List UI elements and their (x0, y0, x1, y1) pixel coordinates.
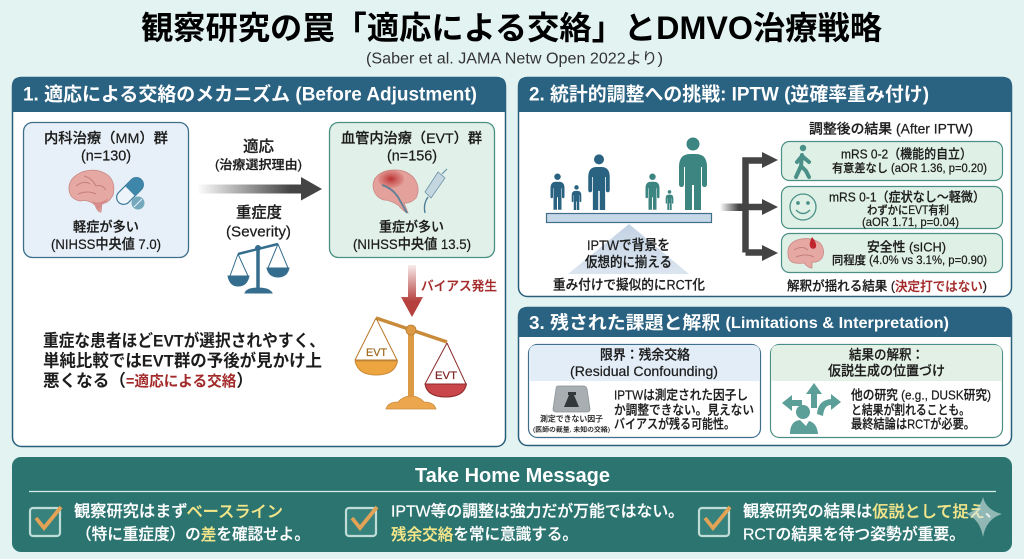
result: safety: 安全性 (sICH) (867, 240, 946, 254)
title: 観察研究の罠「適応による交絡」とDMVO治療戦略 (141, 10, 882, 46)
card: residual confounding: IPTWは測定された因子し (614, 388, 748, 402)
MM group box: 内科治療（MM）群 (44, 130, 168, 146)
panel 3 heading: 3. 残された課題と解釈 (Limitations & Interpretation) (529, 312, 949, 333)
balance beam (546, 214, 712, 222)
result: mRS 0-1 (782, 186, 1002, 229)
indication label (215, 138, 302, 172)
arrow: bias (401, 265, 423, 317)
explanation text (43, 330, 325, 390)
message 2: 残余交絡を常に意識する。 (391, 524, 578, 544)
message 3 (699, 502, 1001, 544)
explanation text: 単純比較ではEVT群の予後が見かけ上 (43, 350, 322, 370)
icon: brain (69, 170, 114, 212)
result: mRS 0-1: わずかにEVT有利 (867, 203, 949, 217)
unmeasured factors caption: 測定できない因子 (540, 414, 603, 424)
card: interpretation: 最終結論はRCTが必要。 (851, 416, 975, 432)
card: residual confounding: か調整できない。見えない (614, 402, 754, 418)
balance fulcrum (568, 224, 689, 274)
panel 1 heading (12, 77, 506, 112)
indication label: (治療選択理由) (215, 157, 302, 172)
MM group box: (n=130) (81, 148, 131, 164)
MM group box (24, 122, 188, 258)
MM group box: 軽症が多い (73, 218, 139, 234)
severity label: 重症度 (236, 204, 282, 222)
caption: unstable interpretation: 解釈が揺れる結果 (決定打ではない) (787, 278, 987, 294)
people: MM group (550, 154, 610, 210)
panel 2: IPTW (518, 77, 1012, 296)
icon: unmeasured weight (553, 386, 590, 412)
icon: balanced scale (228, 244, 289, 293)
result: mRS 0-1: mRS 0-1（症状なし〜軽微） (829, 190, 985, 204)
arrows: branching to results (720, 152, 778, 261)
panel 2 heading (518, 77, 1012, 112)
balance fulcrum: 仮想的に揃える (585, 254, 672, 270)
icon: walking person (796, 145, 809, 177)
icon: tilted scale (355, 318, 466, 409)
icon: brain with lesion (373, 170, 418, 213)
icon: tilted scale: EVT (435, 370, 457, 382)
icon: smiley (790, 194, 816, 220)
card: interpretation: 結果の解釈： (849, 346, 924, 362)
result: mRS 0-2: mRS 0-2（機能的自立） (841, 146, 972, 162)
explanation text: 重症な患者ほどEVTが選択されやすく、 (43, 330, 325, 350)
result: mRS 0-2: 有意差なし (aOR 1.36, p=0.20) (832, 161, 987, 175)
icon: tilted scale: EVT (366, 347, 387, 359)
people: EVT group (646, 138, 707, 210)
EVT group box: (n=156) (387, 148, 437, 164)
card: interpretation: 仮説生成の位置づけ (828, 364, 945, 378)
take home heading: Take Home Message (415, 465, 610, 487)
message 2: IPTW等の調整は強力だが万能ではない。 (391, 502, 684, 520)
arrow: indication (197, 177, 322, 200)
panel 2 heading: 2. 統計的調整への挑戦: IPTW (逆確率重み付け) (529, 82, 929, 106)
result: safety (782, 234, 1002, 272)
card: interpretation: 他の研究 (e.g., DUSK研究) (851, 388, 991, 402)
message 3: RCTの結果を待つ姿勢が重要。 (743, 524, 965, 544)
icon: checkbox 2 (346, 507, 377, 536)
card: residual confounding: 限界：残余交絡 (600, 346, 690, 362)
icon: stent (424, 169, 447, 213)
severity label: (Severity) (226, 224, 291, 240)
card: residual confounding: (Residual Confounding) (570, 363, 718, 379)
unmeasured factors caption (533, 414, 610, 434)
icon: sparkle (966, 497, 1002, 537)
result: mRS 0-2 (782, 142, 1002, 180)
EVT group box (330, 122, 494, 258)
message 3: 観察研究の結果は仮説として捉え、 (743, 502, 1001, 520)
message 1 (30, 502, 310, 544)
unmeasured factors caption: (医師の裁量, 未知の交絡) (533, 424, 610, 434)
result: mRS 0-1: (aOR 1.71, p=0.04) (862, 215, 959, 229)
subtitle: citation: (Saber et al. JAMA Netw Open 2022より) (366, 50, 663, 68)
panel 3 heading (518, 307, 1012, 337)
result: safety: 同程度 (4.0% vs 3.1%, p=0.90) (832, 253, 987, 267)
bias label: バイアス発生 (421, 278, 497, 294)
EVT group box: 重症が多い (379, 218, 444, 234)
severity label (226, 204, 291, 240)
icon: brain with bleed (788, 237, 824, 268)
card: interpretation: と結果が割れることも。 (851, 402, 970, 418)
panel 1: mechanism (12, 77, 506, 446)
caption: pseudo RCT: 重み付けで擬似的にRCT化 (553, 278, 705, 292)
indication label: 適応 (243, 138, 274, 156)
results heading: 調整後の結果 (After IPTW) (809, 122, 973, 136)
panel 3: limitations (518, 307, 1012, 446)
card: interpretation (770, 344, 1002, 438)
take home message panel (12, 457, 1012, 552)
panel 1 heading: 1. 適応による交絡のメカニズム (Before Adjustment) (23, 82, 477, 106)
balance fulcrum: IPTWで背景を (587, 237, 670, 253)
message 2 (346, 502, 684, 544)
card: residual confounding (528, 344, 760, 438)
icon: checkbox 3 (699, 507, 730, 536)
icon: pills (114, 175, 146, 210)
message 1: （特に重症度）の差を確認せよ。 (76, 526, 310, 544)
EVT group box: (NIHSS中央値 13.5) (353, 236, 471, 252)
MM group box: (NIHSS中央値 7.0) (51, 236, 161, 252)
icon: person at crossroads (782, 383, 841, 434)
card: residual confounding: バイアスが残る可能性。 (614, 416, 735, 432)
EVT group box: 血管内治療（EVT）群 (341, 130, 482, 146)
explanation text: 悪くなる（=適応による交絡） (43, 372, 253, 390)
icon: checkbox 1 (30, 507, 61, 536)
message 1: 観察研究はまずベースライン (74, 502, 283, 520)
